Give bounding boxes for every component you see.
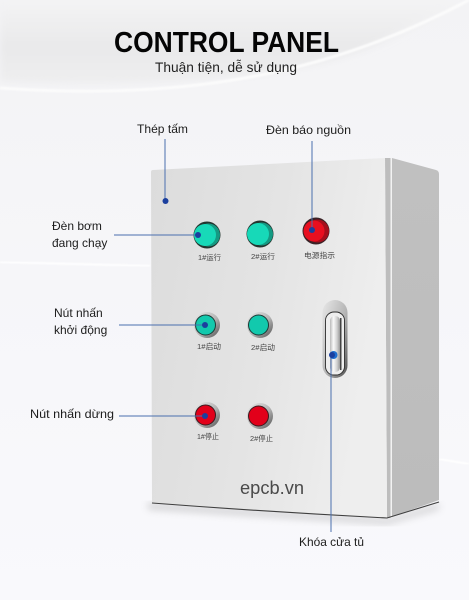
- label: stop button: Nút nhấn dừng: [30, 407, 114, 421]
- label: start button: khởi động: [54, 323, 107, 337]
- leader: steel sheet: [162, 139, 168, 204]
- cabinet shadow: [148, 503, 439, 524]
- leader: door lock: [329, 351, 338, 532]
- leader: pump light: [114, 232, 201, 238]
- cabinet bottom edge: [152, 502, 439, 518]
- title: CONTROL PANEL: [114, 27, 339, 59]
- panel captions: 电源指示: [304, 250, 336, 260]
- panel captions: [197, 250, 336, 443]
- label: steel sheet: Thép tấm: [137, 122, 188, 136]
- panel captions: 1#启动: [197, 341, 222, 351]
- leader: stop button: [119, 413, 208, 419]
- label: pump running light: đang chạy: [52, 236, 107, 250]
- button: 1 start: [194, 312, 220, 338]
- door lock handle: [322, 300, 348, 378]
- panel captions: 2#运行: [251, 251, 276, 261]
- button: 2 start: [247, 312, 273, 338]
- button: 1 stop: [194, 402, 220, 428]
- cabinet front: [151, 158, 387, 518]
- indicator light: 1 running: [194, 222, 220, 248]
- label: power light: Đèn báo nguồn: [266, 123, 351, 137]
- indicator light: 2 running: [246, 220, 274, 248]
- cabinet door edge: [385, 158, 392, 518]
- leader: power light: [309, 141, 315, 233]
- cabinet side: [388, 158, 439, 518]
- button: 2 stop: [247, 403, 273, 429]
- leader: start button: [119, 322, 208, 328]
- label: door lock: Khóa cửa tủ: [299, 535, 364, 549]
- watermark: epcb.vn: [240, 478, 304, 498]
- indicator light: power: [302, 218, 330, 244]
- label: pump running light: Đèn bơm: [52, 219, 102, 233]
- panel captions: 1#停止: [197, 431, 219, 441]
- cabinet: [148, 158, 439, 524]
- label: start button: Nút nhấn: [54, 306, 103, 320]
- subtitle: Thuận tiện, dễ sử dụng: [155, 59, 297, 75]
- panel captions: 2#停止: [250, 433, 273, 443]
- panel captions: 2#启动: [251, 342, 276, 352]
- panel captions: 1#运行: [198, 252, 221, 262]
